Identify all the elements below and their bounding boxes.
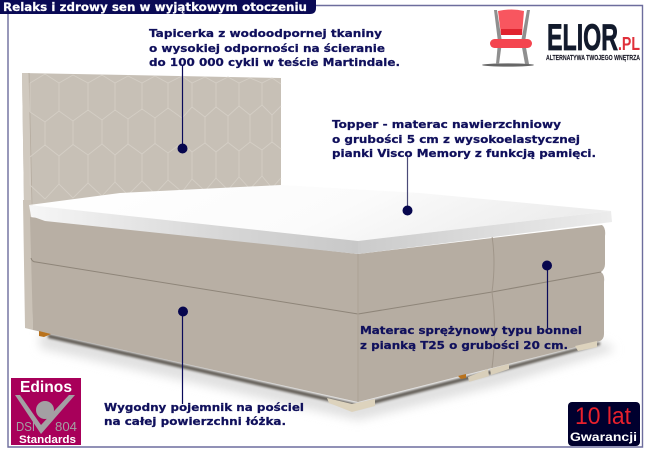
badge: Edinos standards: DSI bbox=[16, 419, 35, 434]
callout: topper pin bbox=[402, 157, 412, 216]
base: front upper and lower box bbox=[30, 217, 605, 402]
callout: mattress text: z pianką T25 o grubości 20 cm. bbox=[360, 339, 568, 352]
badge: Edinos standards: Standards bbox=[19, 434, 76, 446]
headboard bbox=[22, 73, 281, 206]
callout: upholstery text: do 100 000 cykli w teście Martindale. bbox=[149, 56, 400, 69]
callout: upholstery text: o wysokiej odporności na ścieranie bbox=[149, 42, 385, 55]
floor shadow bbox=[40, 332, 615, 420]
callout: upholstery pin bbox=[178, 65, 188, 154]
badge: 10 year warranty: 10 lat bbox=[575, 403, 631, 430]
icon: red chair bbox=[482, 10, 534, 67]
legs bbox=[39, 331, 597, 412]
badge: Edinos standards bbox=[11, 378, 81, 446]
callout: upholstery text: Tapicerka z wodoodpornej tkaniny bbox=[149, 27, 382, 40]
bed base left leg strip bbox=[23, 200, 33, 330]
callout: mattress pin bbox=[542, 260, 552, 328]
badge: Edinos standards: Edinos bbox=[20, 379, 72, 396]
callout: storage text: Wygodny pojemnik na pościel bbox=[104, 401, 304, 414]
title bar: Relaks i zdrowy sen w wyjątkowym otoczeniu bbox=[3, 0, 307, 14]
badge: 10 year warranty bbox=[568, 402, 640, 446]
callout: topper text: Topper - materac nawierzchniowy bbox=[332, 118, 561, 131]
badge: 10 year warranty: Gwarancji bbox=[570, 430, 637, 444]
logo: Elior bbox=[482, 10, 640, 67]
callout: topper text: o grubości 5 cm z wysokoelastycznej bbox=[332, 133, 580, 146]
mattress topper bbox=[29, 185, 612, 254]
callout: storage pin bbox=[178, 306, 188, 404]
callout: mattress text: Materac sprężynowy typu bonnel bbox=[360, 324, 582, 337]
logo domain: .PL bbox=[618, 34, 640, 54]
callout: storage text: na całej powierzchni łóżka. bbox=[104, 415, 286, 428]
callout: topper text: pianki Visco Memory z funkcją pamięci. bbox=[332, 147, 596, 160]
badge: Edinos standards: 804 bbox=[55, 419, 77, 434]
